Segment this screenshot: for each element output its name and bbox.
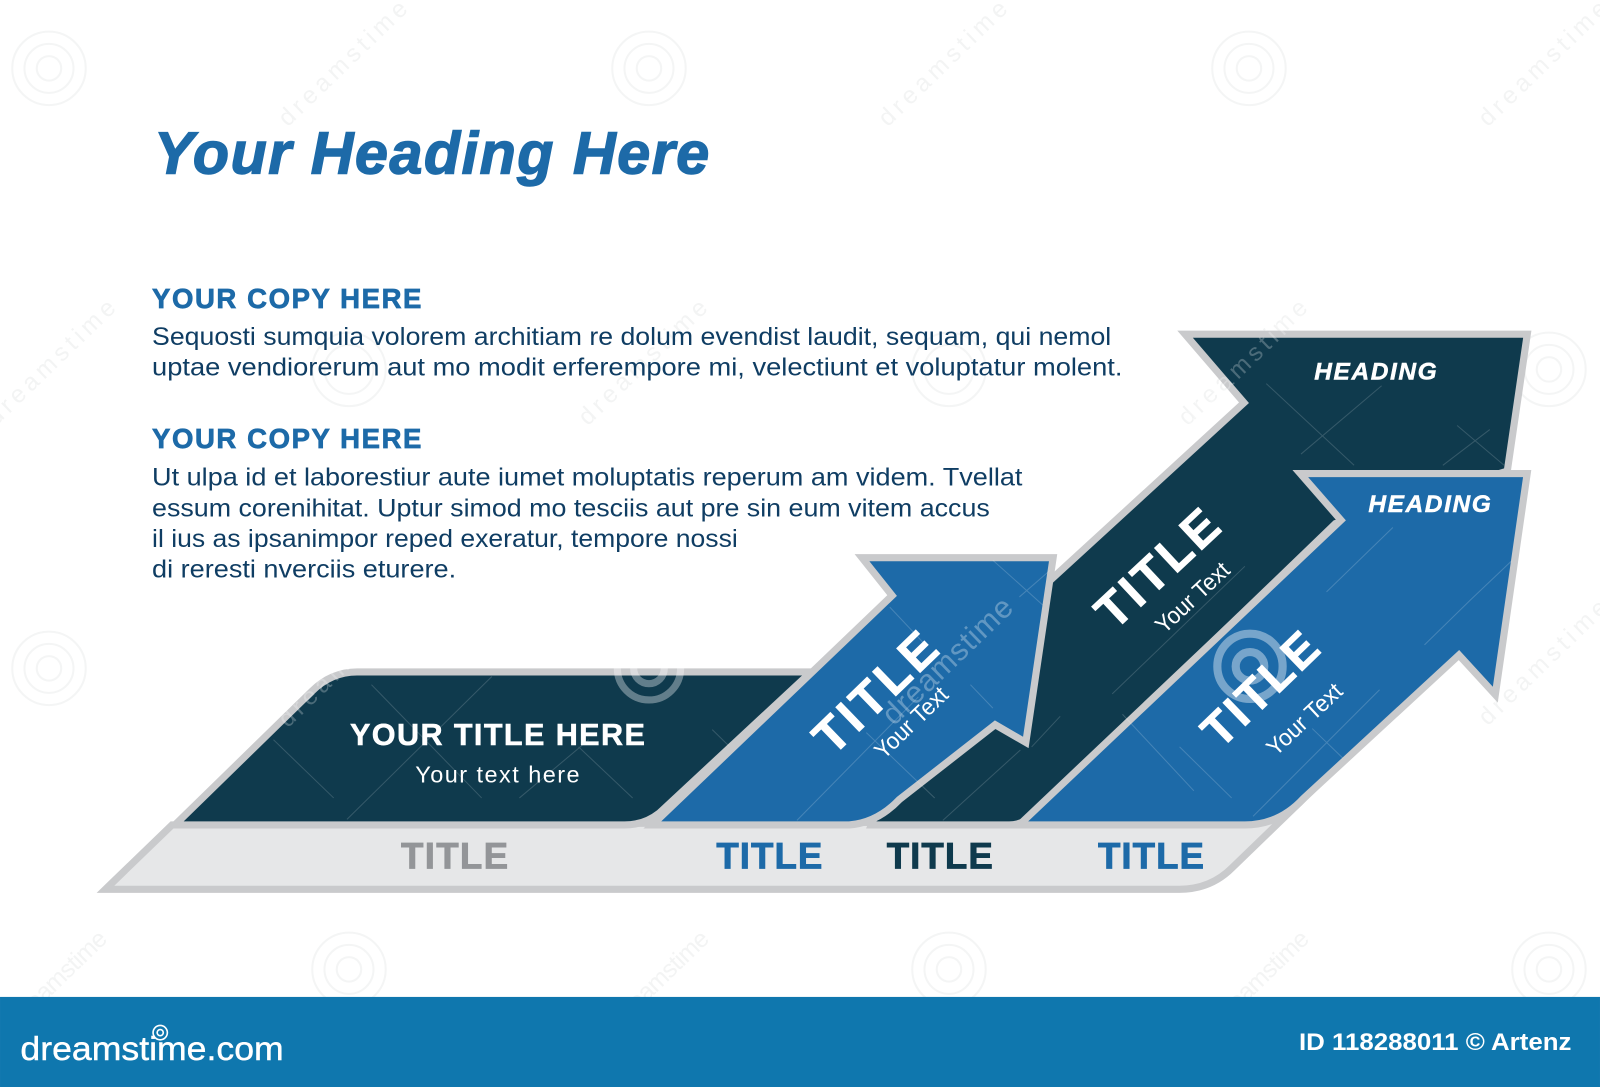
large arrow heading: HEADING	[1368, 491, 1491, 518]
body copy 2	[152, 464, 1022, 584]
panel text: Your text here	[415, 762, 580, 788]
dark arrow text: Your Text	[1150, 556, 1235, 638]
watermark caption on dark arrow: dreamstime	[1175, 294, 1315, 431]
base label dark: TITLE	[887, 835, 993, 876]
body copy 2: essum corenihitat. Uptur simod mo tesciis aut pre sin eum vitem accus	[152, 494, 990, 522]
title: Your Heading Here	[154, 119, 709, 186]
base label blue 1: TITLE	[716, 835, 822, 876]
arrow: small blue arrow	[661, 560, 1050, 821]
body copy 1	[152, 323, 1122, 382]
watermark captions: dreamstime	[573, 294, 713, 431]
watermark caption on panel: dreamstime	[273, 596, 413, 733]
body copy 2: Ut ulpa id et laborestiur aute iumet moluptatis reperum am videm. Tvellat	[152, 464, 1022, 492]
footer bar	[0, 997, 1600, 1087]
body copy 1: uptae vendiorerum aut mo modit erferempore mi, velectiunt et voluptatur molent.	[152, 354, 1122, 382]
body copy 1: Sequosti sumquia volorem architiam re dolum evendist laudit, sequam, qui nemol	[152, 323, 1111, 351]
arrow: large blue arrow	[1028, 477, 1523, 821]
icon: logo spiral	[153, 1025, 167, 1040]
subheading 2: YOUR COPY HERE	[152, 423, 421, 454]
watermark spiral on panel	[617, 637, 681, 700]
dark arrow title: TITLE	[1085, 499, 1231, 640]
large arrow title: TITLE	[1191, 621, 1329, 757]
small arrow text: Your Text	[869, 681, 954, 764]
small arrow title: TITLE	[803, 621, 949, 765]
watermark captions: dreamstime	[1173, 294, 1313, 431]
text block: second copy section	[152, 423, 1022, 584]
watermark spiral on arrow	[1217, 634, 1283, 699]
body copy 2: il ius as ipsanimpor reped exeratur, tempore nossi	[152, 525, 738, 553]
watermark captions: dreamstime	[608, 925, 715, 1030]
dark arrow heading: HEADING	[1314, 359, 1437, 386]
body copy 2: di reresti nverciis eturere.	[152, 556, 456, 584]
text block: first copy section	[152, 283, 1122, 382]
watermark caption on arrow: dreamstime	[875, 590, 1020, 732]
footer credit: ID 118288011 © Artenz	[1299, 1029, 1571, 1056]
subheading 1: YOUR COPY HERE	[152, 283, 421, 314]
base label grey: TITLE	[401, 835, 508, 876]
panel: dark start block	[184, 596, 802, 821]
watermark captions: dreamstime	[6, 925, 113, 1030]
panel title: YOUR TITLE HERE	[350, 718, 645, 752]
base label blue 2: TITLE	[1098, 835, 1204, 876]
large arrow text: Your Text	[1261, 677, 1348, 761]
watermark captions: dreamstime	[1208, 925, 1315, 1030]
footer logo: dreamstime.com	[20, 1031, 284, 1068]
chart: rising arrows diagram	[114, 294, 1523, 886]
base band	[114, 803, 1294, 886]
arrow: dark large arrow	[877, 294, 1523, 821]
